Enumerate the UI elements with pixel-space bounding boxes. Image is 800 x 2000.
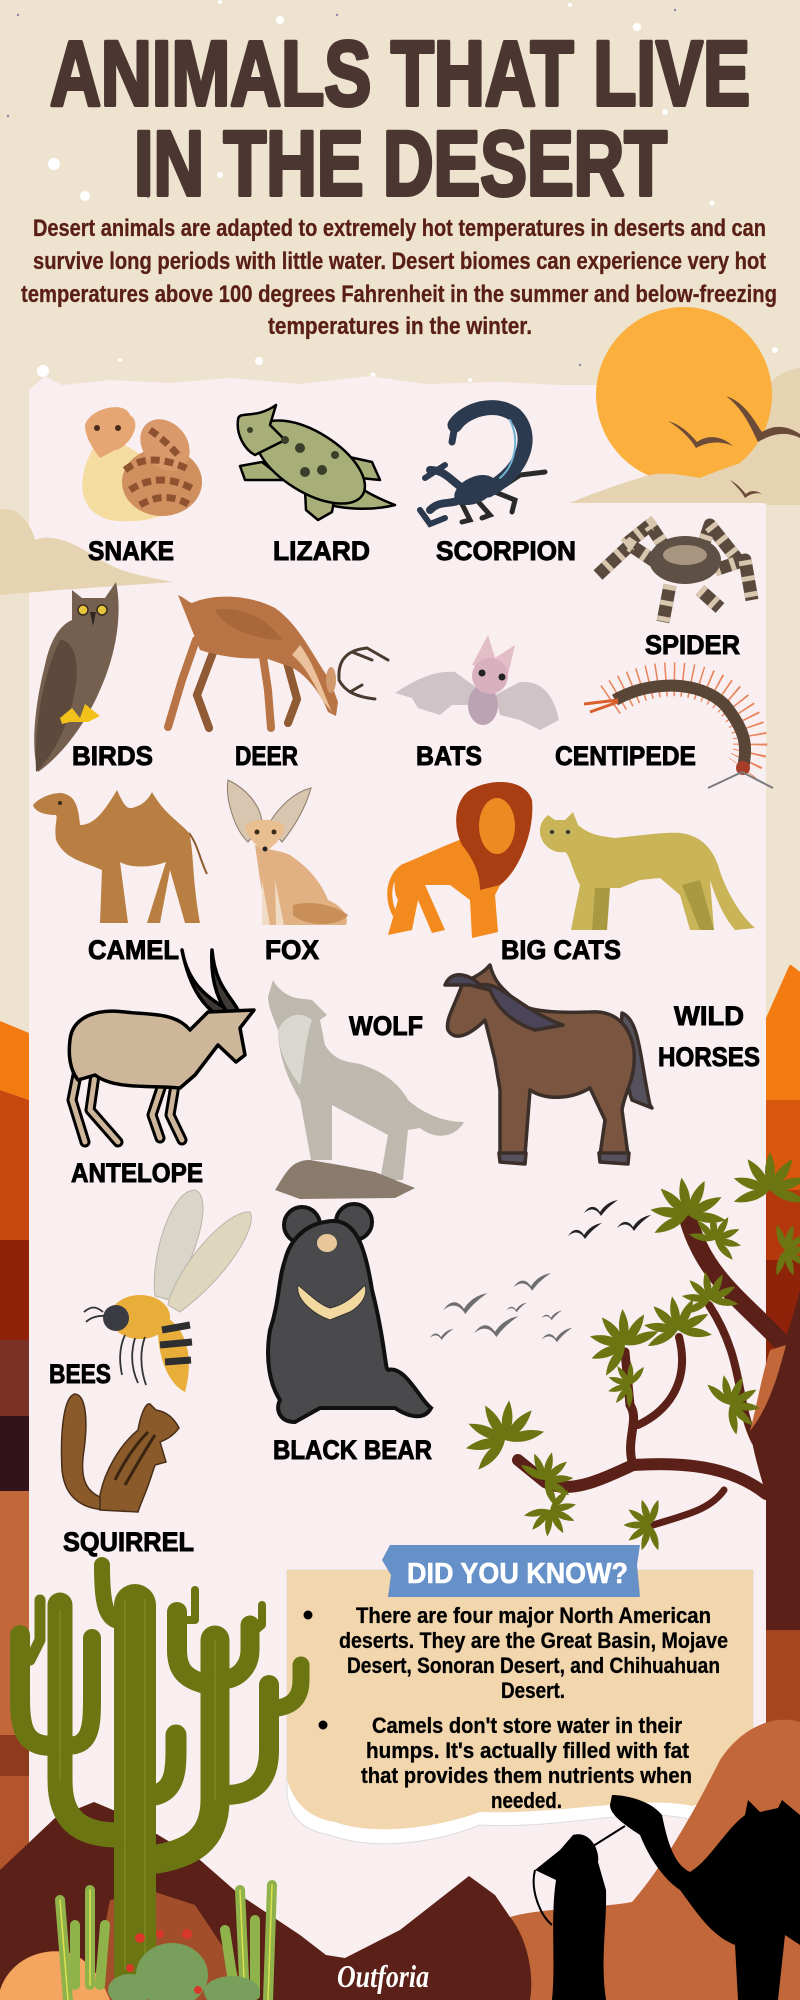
label: spider: SPIDER [645,630,740,660]
icon: bat [395,635,559,730]
icon: antelope [69,950,254,1142]
landscape hills [0,1720,800,2000]
sun [596,307,772,483]
label: wolf: WOLF [349,1011,423,1041]
banner [382,1545,640,1597]
icon: spider [598,525,752,622]
right margin beige strip [766,505,800,965]
fact two [318,1713,692,1813]
label: birds: BIRDS [72,741,153,771]
fact two: needed. [491,1788,562,1813]
icon: centipede [584,679,773,788]
cloud: left [0,509,173,595]
label: wild horses [658,1001,760,1072]
fact one: There are four major North American [356,1603,711,1628]
icon: deer [168,595,388,728]
title [50,23,750,215]
cloud: lower right [569,440,800,523]
birds near sun [668,396,800,498]
label: camel: CAMEL [88,935,179,965]
label: big cats: BIG CATS [501,935,621,965]
icon: squirrel [62,1394,179,1512]
icon: big cats [388,782,755,938]
fact one: Desert, Sonoran Desert, and Chihuahuan [347,1653,720,1678]
fact two: humps. It's actually filled with fat [366,1738,690,1763]
fact one: Desert. [501,1678,565,1703]
icon: wolf [268,980,464,1199]
icon: black bear [268,1204,431,1422]
label: wild horses: HORSES [658,1042,760,1072]
label: lizard: LIZARD [273,536,370,566]
icon: camel [33,790,207,923]
label: bats: BATS [416,741,482,771]
icon: saguaro cactus [20,1565,301,1975]
icon: bee [84,1190,251,1392]
icon: lizard [238,404,395,520]
banner heading: DID YOU KNOW? [407,1558,628,1590]
icon: horses [445,965,652,1164]
icon: fox [227,780,348,925]
logo: Outforia [337,1958,429,1994]
panel: did you know [287,1545,753,1844]
fact one [304,1603,728,1703]
label: black bear: BLACK BEAR [273,1435,432,1465]
label: snake: SNAKE [88,536,174,566]
label: centipede: CENTIPEDE [555,741,696,771]
intro text [21,215,777,340]
cloud: upper right [640,368,800,510]
silhouette: person [534,1826,625,2000]
label: bees: BEES [49,1359,111,1389]
fact one: deserts. They are the Great Basin, Mojave [339,1628,728,1653]
label: antelope: ANTELOPE [71,1158,203,1188]
label: deer: DEER [235,741,298,771]
torn paper edge [287,1570,753,1844]
background stars [7,0,778,721]
icon: scorpion [420,408,545,524]
label: squirrel: SQUIRREL [63,1527,194,1557]
fact two: that provides them nutrients when [361,1763,692,1788]
panel: animals background [29,376,766,1960]
label: wild horses: WILD [674,1001,744,1031]
icon: snake [82,407,202,521]
flock of birds [430,1200,651,1342]
icon: owl [34,582,119,772]
silhouette: camel [610,1795,800,2000]
label: fox: FOX [265,935,319,965]
tree [451,1152,800,1560]
icon: small cacti [60,1885,272,2000]
intro text: temperatures in the winter. [268,313,532,340]
label: scorpion: SCORPION [436,536,576,566]
fact two: Camels don't store water in their [372,1713,682,1738]
tan note [287,1570,753,1829]
